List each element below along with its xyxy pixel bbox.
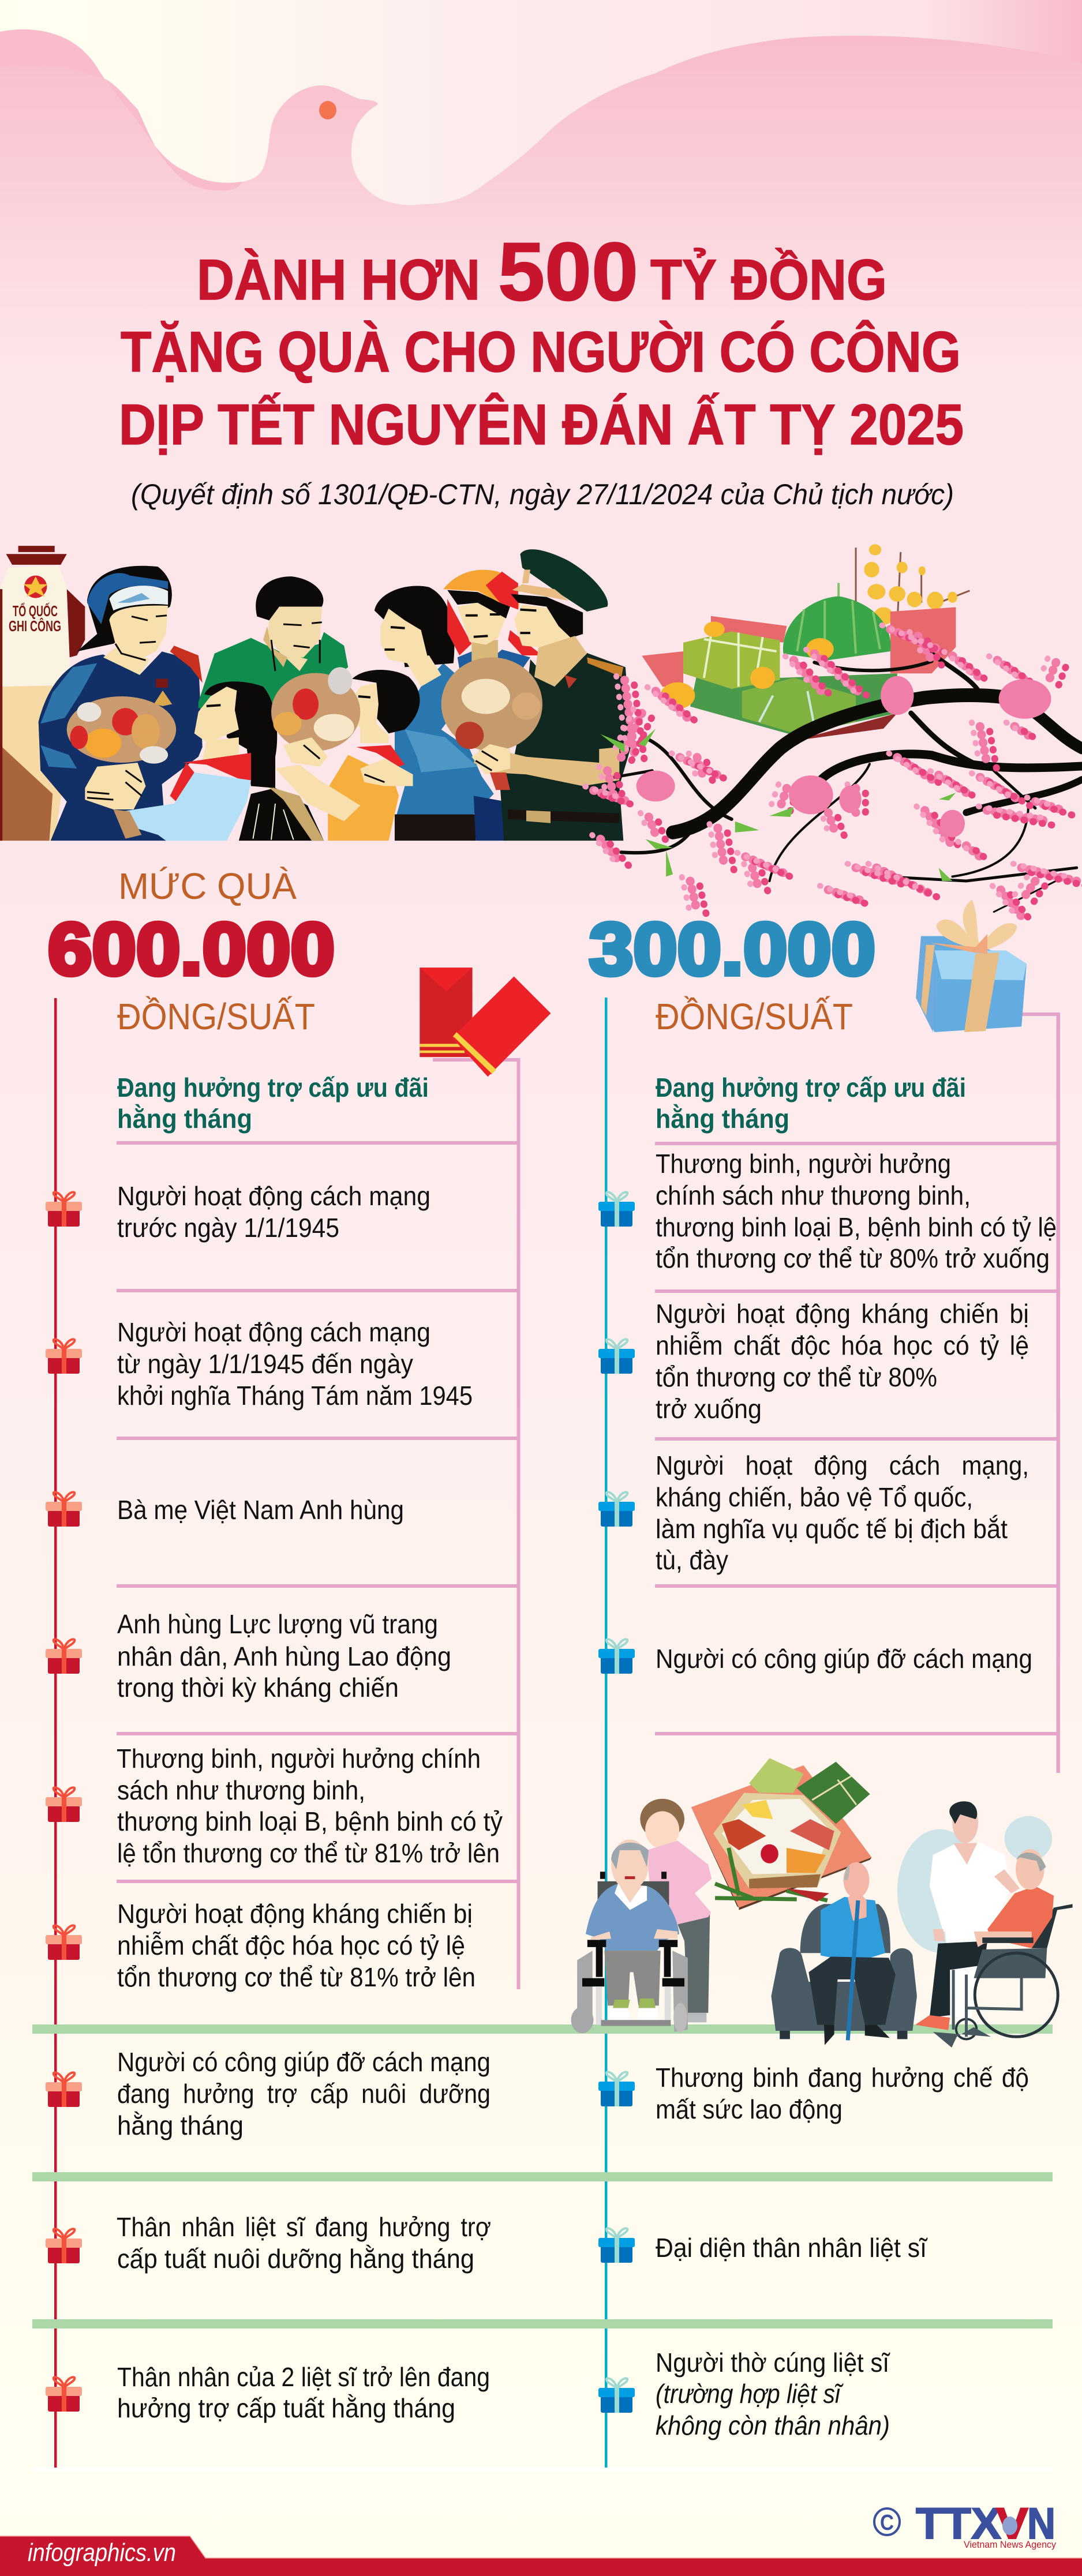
right item 3 [598, 1450, 1029, 1575]
left item 9: hưởng trợ cấp tuất hằng tháng [117, 2393, 455, 2423]
illustration: peach blossom branch [585, 625, 1082, 921]
left item 1: trước ngày 1/1/1945 [117, 1213, 339, 1243]
right subheading [656, 1073, 966, 1134]
right item 3: làm nghĩa vụ quốc tế bị địch bắt [656, 1514, 1008, 1544]
column right [598, 1073, 1057, 2440]
right item 7: (trường hợp liệt sĩ [656, 2379, 844, 2409]
icon: blue gift box [916, 899, 1027, 1032]
left item 2: từ ngày 1/1/1945 đến ngày [117, 1349, 413, 1379]
pink frame left [117, 1058, 521, 1989]
left subheading: Đang hưởng trợ cấp ưu đãi [117, 1073, 429, 1103]
right item 2 [598, 1299, 1029, 1424]
left item 6: tổn thương cơ thể từ 81% trở lên [117, 1962, 476, 1992]
right item 2: Người hoạt động kháng chiến bị [656, 1299, 1029, 1329]
green row bars [32, 2024, 1053, 2328]
icon: red envelopes [420, 968, 551, 1077]
left item 5 [46, 1743, 503, 1868]
pink frame right [655, 1013, 1060, 1773]
dove wave header [0, 29, 1082, 369]
left item 5: lệ tổn thương cơ thể từ 81% trở lên [117, 1838, 500, 1868]
left item 6: Người hoạt động kháng chiến bị [117, 1899, 473, 1929]
right item 2: trở xuống [656, 1394, 762, 1424]
website credit: infographics.vn [28, 2538, 176, 2567]
title: TỶ ĐỒNG [650, 248, 887, 312]
left item 7: Người có công giúp đỡ cách mạng [117, 2047, 491, 2077]
left item 3 [46, 1492, 404, 1527]
logo: TTXVN: TTX [916, 2499, 1001, 2548]
right subheading: hằng tháng [656, 1104, 789, 1134]
heading: mức quà: MỨC QUÀ [118, 865, 297, 907]
logo: TTXVN: V [996, 2499, 1028, 2548]
title [119, 226, 964, 456]
right item 3: kháng chiến, bảo vệ Tổ quốc, [656, 1482, 973, 1512]
right item 5: mất sức lao động [656, 2094, 843, 2124]
left item 1 [46, 1181, 430, 1243]
right item 7: không còn thân nhân) [656, 2410, 890, 2440]
right subheading: Đang hưởng trợ cấp ưu đãi [656, 1073, 966, 1103]
left subheading [117, 1073, 429, 1134]
left item 9: Thân nhân của 2 liệt sĩ trở lên đang [117, 2362, 490, 2392]
right item 2: tổn thương cơ thể từ 80% [656, 1362, 937, 1392]
logo: TTXVN [874, 2499, 1056, 2550]
right item 7 [598, 2348, 890, 2440]
right item 3: Người hoạt động cách mạng, [656, 1450, 1029, 1480]
left item 7: hằng tháng [117, 2110, 244, 2140]
illustration: elderly people and tet tray [571, 1758, 1073, 2048]
left item 2: khởi nghĩa Tháng Tám năm 1945 [117, 1381, 473, 1411]
title: DÀNH HƠN [197, 248, 480, 312]
left item 1: Người hoạt động cách mạng [117, 1181, 430, 1211]
right item 3: tù, đày [656, 1545, 728, 1575]
right item 1 [598, 1149, 1057, 1273]
right item 6: Đại diện thân nhân liệt sĩ [656, 2233, 928, 2263]
left subheading: hằng tháng [117, 1104, 252, 1134]
left item 7: đang hưởng trợ cấp nuôi dưỡng [117, 2079, 491, 2109]
logo: TTXVN: Vietnam News Agency [964, 2539, 1056, 2550]
illustration: people with flowers: GHI CÔNG [9, 617, 61, 635]
right item 1: Thương binh, người hưởng [656, 1149, 951, 1179]
illustration: people with flowers [0, 546, 631, 841]
title: TẶNG QUÀ CHO NGƯỜI CÓ CÔNG [121, 320, 961, 384]
right item 7: Người thờ cúng liệt sĩ [656, 2348, 890, 2378]
right item 4: Người có công giúp đỡ cách mạng [656, 1644, 1032, 1674]
left item 4 [46, 1609, 451, 1703]
left item 8: cấp tuất nuôi dưỡng hằng tháng [117, 2244, 474, 2274]
logo: TTXVN: N [1027, 2499, 1055, 2548]
tet gift tray [691, 1758, 871, 1910]
right item 1: chính sách như thương binh, [656, 1180, 971, 1210]
left item 3: Bà mẹ Việt Nam Anh hùng [117, 1495, 404, 1525]
left item 4: trong thời kỳ kháng chiến [117, 1673, 399, 1703]
left item 4: nhân dân, Anh hùng Lao động [117, 1641, 451, 1671]
left item 2 [46, 1317, 473, 1411]
amount 600.000: 600.000 [48, 908, 335, 991]
title: 500 [498, 226, 638, 318]
left item 2: Người hoạt động cách mạng [117, 1317, 430, 1347]
illustration: people with flowers: TỔ QUỐC [13, 602, 58, 620]
left item 5: Thương binh, người hưởng chính [117, 1743, 481, 1773]
left item 9 [46, 2362, 490, 2423]
left item 5: thương binh loại B, bệnh binh có tỷ [117, 1806, 503, 1836]
figure: man in wheelchair with caregiver [571, 1799, 712, 2033]
right item 5 [598, 2063, 1029, 2124]
unit left: ĐỒNG/SUẤT [117, 996, 315, 1037]
illustration: tet food tray [642, 544, 969, 741]
right item 1: tổn thương cơ thể từ 80% trở xuống [656, 1243, 1050, 1273]
right item 5: Thương binh đang hưởng chế độ [656, 2063, 1029, 2093]
right item 2: nhiễm chất độc hóa học có tỷ lệ [656, 1330, 1029, 1360]
footer band [0, 2536, 1082, 2576]
right item 6 [598, 2228, 928, 2263]
left item 6 [46, 1899, 476, 1992]
left item 8 [46, 2212, 491, 2274]
column lines [32, 998, 1053, 2471]
logo: TTXVN: C [880, 2511, 894, 2535]
amount 300.000: 300.000 [589, 908, 875, 991]
figure: nurse and man in wheelchair [897, 1801, 1073, 2048]
title: DỊP TẾT NGUYÊN ĐÁN ẤT TỴ 2025 [119, 392, 964, 456]
left item 6: nhiễm chất độc hóa học có tỷ lệ [117, 1930, 465, 1960]
left item 5: sách như thương binh, [117, 1775, 365, 1805]
column left [46, 1073, 503, 2423]
figure: old man in armchair [771, 1862, 917, 2045]
left item 7 [46, 2047, 491, 2140]
left item 4: Anh hùng Lực lượng vũ trang [117, 1609, 438, 1639]
subtitle: (Quyết định số 1301/QĐ-CTN, ngày 27/11/2024 của Chủ tịch nước) [131, 478, 954, 511]
unit right: ĐỒNG/SUẤT [656, 996, 853, 1037]
left item 8: Thân nhân liệt sĩ đang hưởng trợ [117, 2212, 491, 2242]
